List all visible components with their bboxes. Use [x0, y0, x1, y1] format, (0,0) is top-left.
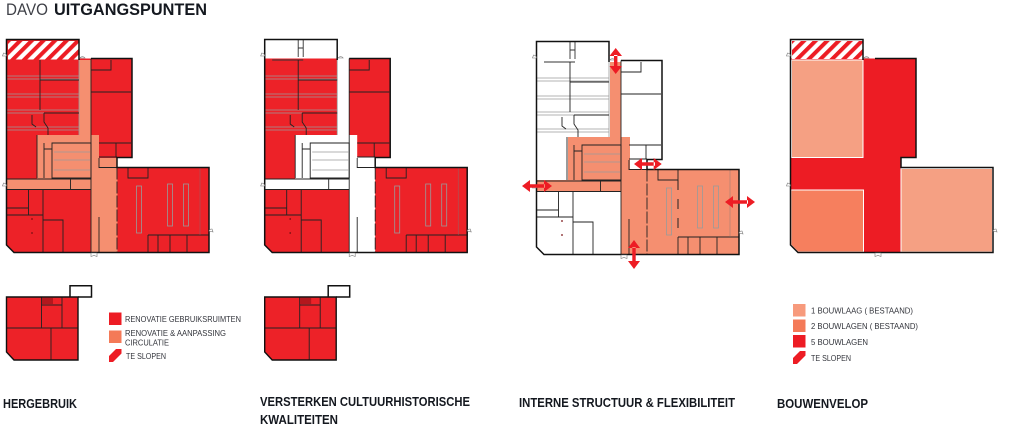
heading: versterken cultuurhistorische kwaliteiten: VERSTERKEN CULTUURHISTORISCHE	[260, 395, 470, 409]
panel: bouwenvelop massing plan	[786, 40, 997, 256]
arrow: bottom	[628, 240, 640, 269]
legend: bouwenvelop	[793, 304, 918, 364]
heading: hergebruik: HERGEBRUIK	[3, 397, 77, 411]
circulation area	[6, 60, 118, 252]
one storey wing	[901, 168, 992, 252]
legend: hergebruik: RENOVATIE GEBRUIKSRUIMTEN	[125, 314, 241, 324]
legend: bouwenvelop: 1 BOUWLAAG ( BESTAAND)	[811, 306, 913, 316]
legend: hergebruik: CIRCULATIE	[125, 338, 169, 348]
circulation and flexible area	[537, 62, 739, 254]
panel: cultuurhistorische kwaliteiten floor plan	[261, 40, 471, 256]
legend: bouwenvelop: 2 BOUWLAGEN ( BESTAAND)	[811, 321, 918, 331]
arrow: centre	[634, 158, 662, 170]
legend: hergebruik: TE SLOPEN	[126, 351, 166, 361]
demolition hatch	[792, 41, 862, 59]
heading: versterken cultuurhistorische kwaliteiten	[260, 395, 470, 426]
arrow: top	[610, 48, 622, 74]
demolition hatch	[8, 41, 78, 60]
panel: cultuurhistorische kwaliteiten small plan	[265, 286, 350, 360]
title: DAVO	[6, 1, 48, 19]
legend: bouwenvelop: 5 BOUWLAGEN	[811, 337, 868, 347]
arrows: flexibility directions	[522, 48, 755, 269]
legend: hergebruik	[109, 312, 241, 362]
two storey block	[791, 190, 864, 252]
panel: hergebruik small plan	[6, 286, 92, 360]
legend: bouwenvelop: TE SLOPEN	[811, 353, 851, 363]
arrow: right	[725, 196, 755, 208]
heading: bouwenvelop: BOUWENVELOP	[777, 397, 868, 411]
heading: interne structuur: INTERNE STRUCTUUR & FLEXIBILITEIT	[519, 396, 735, 410]
title: UITGANGSPUNTEN	[54, 1, 207, 19]
arrow: left	[522, 180, 552, 192]
legend: hergebruik: RENOVATIE & AANPASSING	[125, 328, 226, 338]
one storey block	[792, 60, 863, 158]
panel: hergebruik floor plan	[2, 40, 213, 256]
panel: interne structuur floor plan	[532, 42, 743, 258]
